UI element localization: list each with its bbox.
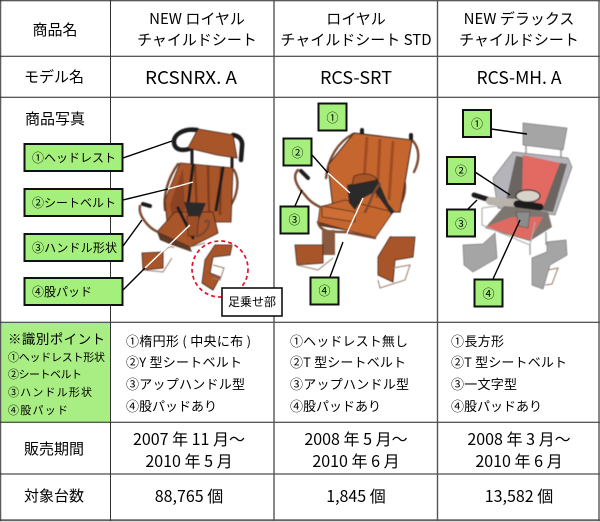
- label: chair 1 headrest: ①ヘッドレスト: [32, 149, 116, 166]
- heading: product name 2: [280, 8, 432, 50]
- text: model 2: RCS-SRT: [320, 64, 392, 90]
- label: chair 3 marker 3: ③: [455, 215, 467, 232]
- text: identification points list: ②シートベルト: [8, 366, 82, 382]
- heading: product name 1: [137, 8, 257, 50]
- label: chair 2 marker 1: [318, 104, 346, 130]
- label: chair 1 headrest: [24, 144, 122, 171]
- heading: row header product photo: 商品写真: [25, 108, 85, 129]
- label: chair 1 handle: ③ハンドル形状: [32, 239, 117, 256]
- text: features chair 1: ④股パッドあり: [126, 396, 217, 415]
- label: chair 2 marker 4: ④: [318, 282, 331, 299]
- label: chair 1 seat belt: [24, 189, 122, 216]
- heading: row header product name: 商品名: [32, 19, 78, 40]
- text: features chair 3: ④股パッドあり: [451, 396, 542, 415]
- text: sales period 1: 2007 年 11 月～: [133, 426, 245, 450]
- label: chair 1 seat belt: ②シートベルト: [32, 194, 116, 211]
- text: features chair 3: ①長方形: [451, 331, 504, 350]
- callout: footrest label: [222, 288, 282, 316]
- label: chair 2 marker 2: [284, 138, 312, 166]
- text: identification points list: ①ヘッドレスト形状: [8, 349, 105, 365]
- heading: product name 3: NEW デラックス: [464, 8, 574, 29]
- label: chair 3 marker 2: [447, 157, 475, 184]
- heading: product name 3: [459, 8, 579, 50]
- text: features chair 2: [290, 331, 409, 415]
- callout: leader lines chair 2: [295, 155, 363, 277]
- photo: chair 2 brown seat: [295, 130, 418, 288]
- text: features chair 2: ①ヘッドレスト無し: [290, 331, 408, 350]
- text: features chair 1: ③アップハンドル型: [126, 374, 245, 393]
- text: sales period 1: 2010 年 5 月: [145, 448, 233, 472]
- label: chair 1 crotch pad: [24, 278, 122, 305]
- callout: footrest dashed circle: [192, 241, 248, 297]
- text: features chair 1: ①楕円形 ( 中央に布 ): [126, 331, 251, 350]
- text: sales period 2: [304, 426, 408, 472]
- callout: leader lines chair 1: [123, 141, 193, 290]
- label: chair 3 marker 4: ④: [482, 285, 495, 302]
- text: features chair 2: ④股パッドあり: [290, 396, 381, 415]
- callout: footrest label: 足乗せ部: [228, 293, 276, 310]
- photo: chair 1 brown seat with headrest: [140, 129, 242, 290]
- text: units 2: 1,845 個: [326, 483, 386, 507]
- text: features chair 1: [126, 331, 251, 415]
- text: model 1: RCSNRX. A: [145, 64, 237, 90]
- text: sales period 3: [467, 426, 571, 472]
- label: chair 3 marker 1: [463, 110, 491, 137]
- label: chair 3 marker 4: [474, 280, 502, 306]
- heading: product name 1: NEW ロイヤル: [149, 8, 245, 29]
- text: features chair 3: ②T 型シートベルト: [451, 352, 567, 371]
- label: chair 2 marker 4: [310, 278, 338, 304]
- heading: product name 2: チャイルドシート STD: [280, 29, 432, 50]
- text: units 3: 13,582 個: [485, 483, 553, 507]
- callout: leader lines chair 3: [468, 129, 527, 279]
- heading: row header target units: 対象台数: [24, 485, 84, 506]
- text: features chair 2: ②T 型シートベルト: [290, 352, 406, 371]
- text: features chair 1: ②Y 型シートベルト: [126, 352, 242, 371]
- label: chair 3 marker 2: ②: [455, 162, 467, 179]
- text: features chair 3: [451, 331, 567, 415]
- text: sales period 2: 2010 年 6 月: [312, 448, 400, 472]
- text: model 3: RCS-MH. A: [476, 64, 562, 90]
- text: identification points list: ③ハンドル形状: [8, 384, 92, 400]
- text: sales period 3: 2008 年 3 月～: [467, 426, 571, 450]
- text: features chair 2: ③アップハンドル型: [290, 374, 409, 393]
- heading: product name 2: ロイヤル: [326, 8, 386, 29]
- text: sales period 2: 2008 年 5 月～: [304, 426, 408, 450]
- text: units 1: 88,765 個: [155, 483, 223, 507]
- label: chair 2 marker 3: ③: [288, 211, 301, 228]
- heading: row header model name: モデル名: [24, 66, 84, 87]
- label: chair 2 marker 1: ①: [326, 109, 339, 126]
- text: features chair 3: ③一文字型: [451, 374, 517, 393]
- heading: product name 3: チャイルドシート: [459, 29, 579, 50]
- heading: row header sales period: 販売期間: [24, 438, 84, 459]
- label: chair 2 marker 2: ②: [291, 144, 304, 161]
- text: identification points list: ④股パッド: [8, 402, 68, 418]
- label: chair 3 marker 3: [447, 210, 475, 236]
- text: sales period 1: [133, 426, 245, 472]
- label: chair 1 handle: [24, 234, 122, 261]
- text: sales period 3: 2010 年 6 月: [475, 448, 563, 472]
- label: chair 2 marker 3: [280, 206, 308, 234]
- heading: product name 1: チャイルドシート: [137, 29, 257, 50]
- text: identification points list: [8, 328, 105, 418]
- text: identification points list: ※識別ポイント: [8, 328, 105, 348]
- label: chair 3 marker 1: ①: [471, 115, 483, 132]
- panel: green identification points cell: [1, 323, 110, 422]
- label: chair 1 crotch pad: ④股パッド: [32, 283, 92, 300]
- photo: chair 3 grey and pink seat: [463, 123, 572, 289]
